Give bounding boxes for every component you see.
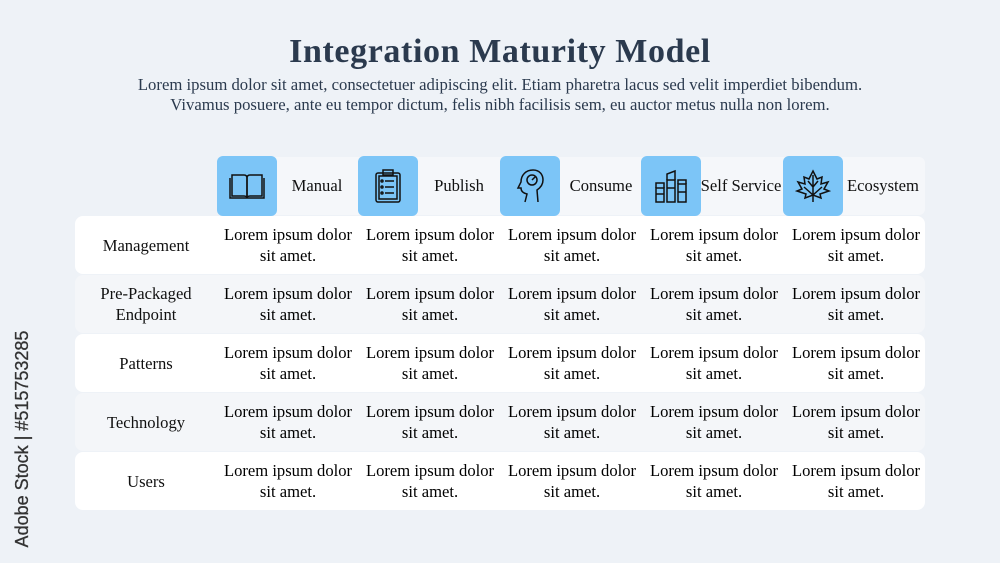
cells row 4: Lorem ipsum dolor <box>508 402 636 421</box>
icon: head <box>500 156 560 216</box>
cells row 2: sit amet. <box>828 305 884 324</box>
cells row 3: sit amet. <box>544 364 600 383</box>
cells row 2: Lorem ipsum dolor <box>224 284 352 303</box>
cells row 1: sit amet. <box>686 246 742 265</box>
cells row 1: sit amet. <box>260 246 316 265</box>
cells row 1: sit amet. <box>828 246 884 265</box>
cells row 5: Lorem ipsum dolor <box>650 461 778 480</box>
cells row 4: sit amet. <box>260 423 316 442</box>
cells row 5: sit amet. <box>544 482 600 501</box>
row: Technology <box>75 393 925 451</box>
row label: Patterns: Patterns <box>119 354 173 372</box>
cells row 5: Lorem ipsum dolor <box>508 461 636 480</box>
row label: Users: Users <box>127 472 165 490</box>
label: Consume: Consume <box>570 176 632 195</box>
cells row 5: Lorem ipsum dolor <box>792 461 920 480</box>
cells row 3: sit amet. <box>260 364 316 383</box>
cells row 4: Lorem ipsum dolor <box>224 402 352 421</box>
icon: book <box>217 156 277 216</box>
cells row 2 <box>224 284 920 324</box>
row: Users <box>75 452 925 510</box>
row label: Pre-Packaged Endpoint: Endpoint <box>116 305 176 324</box>
row label: Management: Management <box>103 236 189 254</box>
cells row 1: Lorem ipsum dolor <box>792 225 920 244</box>
label: Ecosystem: Ecosystem <box>847 176 919 195</box>
cells row 5: Lorem ipsum dolor <box>366 461 494 480</box>
row: Patterns <box>75 334 925 392</box>
cells row 5: sit amet. <box>260 482 316 501</box>
cells row 3 <box>224 343 920 383</box>
label: Publish: Publish <box>434 176 484 195</box>
cells row 4: sit amet. <box>686 423 742 442</box>
cells row 2: Lorem ipsum dolor <box>508 284 636 303</box>
icon: clipboard <box>358 156 418 216</box>
icon: leaf <box>783 156 843 216</box>
cells row 2: Lorem ipsum dolor <box>650 284 778 303</box>
title: Integration Maturity Model <box>289 33 711 70</box>
cells row 1: Lorem ipsum dolor <box>508 225 636 244</box>
cells row 2: Lorem ipsum dolor <box>366 284 494 303</box>
cells row 3: Lorem ipsum dolor <box>224 343 352 362</box>
cells row 2: sit amet. <box>402 305 458 324</box>
cells row 5: sit amet. <box>828 482 884 501</box>
row label: Technology: Technology <box>107 412 185 432</box>
cells row 1: sit amet. <box>402 246 458 265</box>
label: Manual: Manual <box>292 176 342 195</box>
cells row 4: sit amet. <box>544 423 600 442</box>
cells row 1: Lorem ipsum dolor <box>366 225 494 244</box>
cells row 2: sit amet. <box>686 305 742 324</box>
cells row 5: sit amet. <box>686 482 742 501</box>
row: Management <box>75 216 925 274</box>
row label: Pre-Packaged Endpoint: Pre-Packaged <box>100 284 192 303</box>
icon: hands <box>641 156 701 216</box>
cells row 4: Lorem ipsum dolor <box>650 402 778 421</box>
header strip <box>217 157 925 215</box>
row: Pre-Packaged Endpoint <box>75 275 925 333</box>
cells row 1: Lorem ipsum dolor <box>650 225 778 244</box>
cells row 4: Lorem ipsum dolor <box>366 402 494 421</box>
watermark text: Adobe Stock | #515753285 <box>12 331 32 547</box>
cells row 5 <box>224 461 920 501</box>
cells row 1 <box>224 225 920 265</box>
cells row 3: Lorem ipsum dolor <box>792 343 920 362</box>
subtitle <box>138 75 862 114</box>
subtitle: Lorem ipsum dolor sit amet, consectetuer adipiscing elit. Etiam pharetra lacus sed velit imperdiet bibendum. <box>138 75 862 94</box>
row label: Pre-Packaged Endpoint <box>100 284 192 324</box>
cells row 4: Lorem ipsum dolor <box>792 402 920 421</box>
cells row 2: Lorem ipsum dolor <box>792 284 920 303</box>
cells row 3: sit amet. <box>686 364 742 383</box>
cells row 3: sit amet. <box>402 364 458 383</box>
cells row 2: sit amet. <box>544 305 600 324</box>
cells row 3: Lorem ipsum dolor <box>650 343 778 362</box>
cells row 3: Lorem ipsum dolor <box>366 343 494 362</box>
cells row 4 <box>224 402 920 442</box>
label: Self Service: Self Service <box>701 176 781 195</box>
cells row 2: sit amet. <box>260 305 316 324</box>
cells row 4: sit amet. <box>828 423 884 442</box>
cells row 4: sit amet. <box>402 423 458 442</box>
subtitle: Vivamus posuere, ante eu tempor dictum, felis nibh facilisis sem, eu auctor metus nulla non lorem. <box>170 95 830 114</box>
cells row 5: sit amet. <box>402 482 458 501</box>
cells row 3: sit amet. <box>828 364 884 383</box>
cells row 3: Lorem ipsum dolor <box>508 343 636 362</box>
cells row 1: sit amet. <box>544 246 600 265</box>
cells row 5: Lorem ipsum dolor <box>224 461 352 480</box>
cells row 1: Lorem ipsum dolor <box>224 225 352 244</box>
